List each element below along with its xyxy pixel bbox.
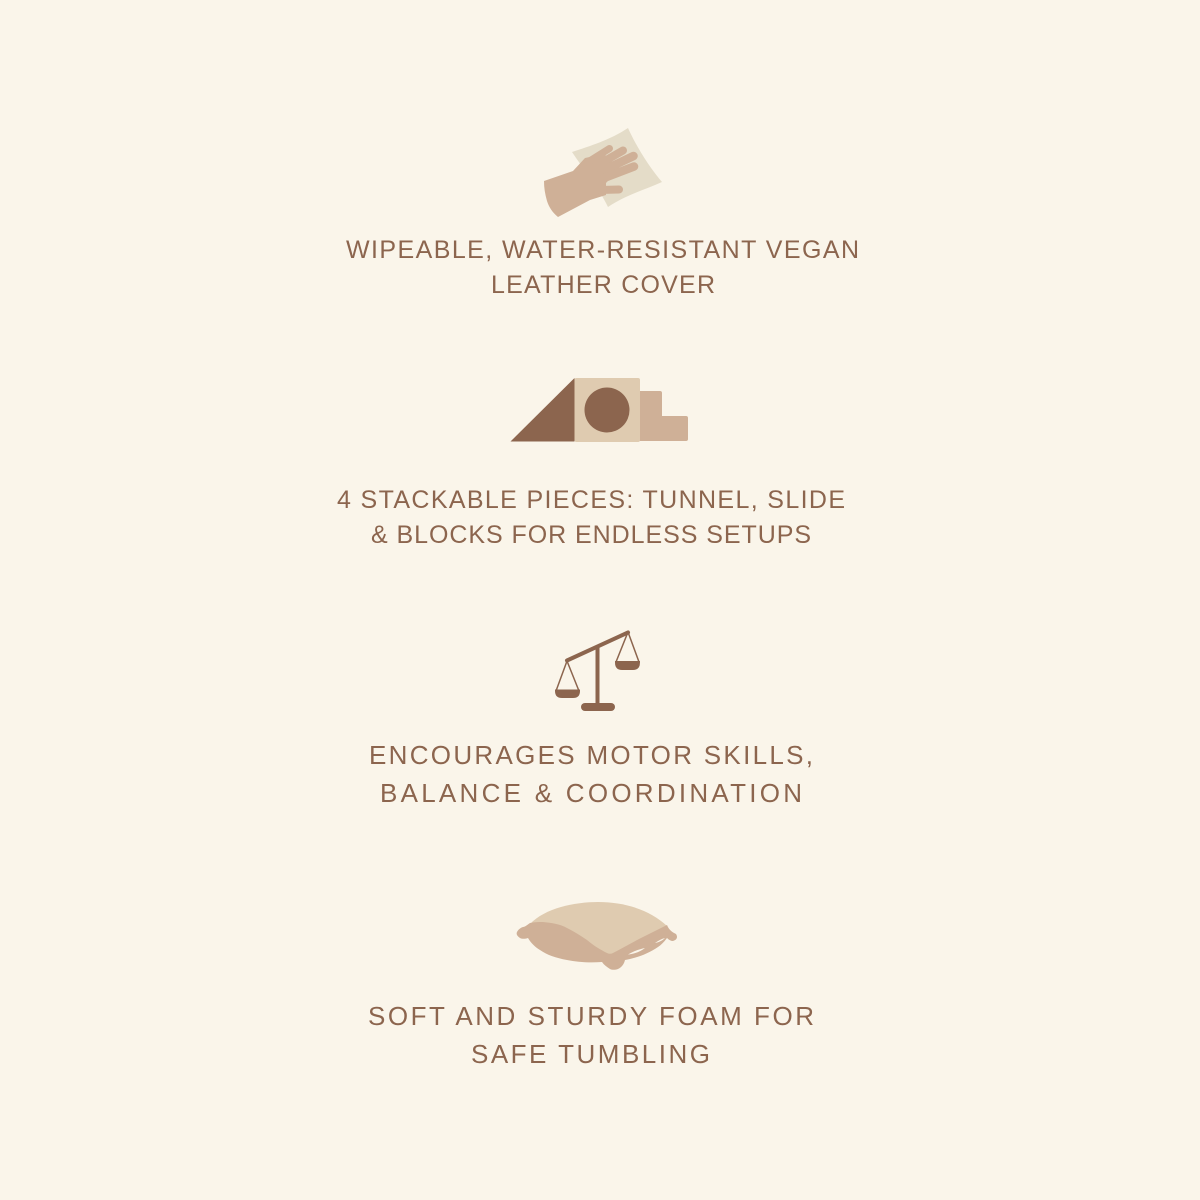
- icon: balance scale: [555, 632, 640, 711]
- text: stackable pieces: 4 STACKABLE PIECES: TUNNEL, SLIDE: [337, 486, 845, 514]
- text: stackable pieces: [337, 486, 845, 549]
- text: motor skills: [369, 740, 813, 808]
- text: motor skills: BALANCE & COORDINATION: [380, 778, 802, 808]
- feature: stackable pieces: [337, 378, 845, 549]
- text: wipeable cover: WIPEABLE, WATER-RESISTANT VEGAN: [346, 236, 859, 264]
- text: soft foam: SAFE TUMBLING: [471, 1039, 710, 1069]
- icon: hand wiping cloth: [544, 128, 662, 217]
- icon: tunnel, slide and blocks: [510, 378, 688, 442]
- feature: wipeable cover: [346, 128, 859, 299]
- icon: foam cushion: [517, 902, 677, 970]
- text: soft foam: SOFT AND STURDY FOAM FOR: [368, 1001, 814, 1031]
- text: wipeable cover: LEATHER COVER: [491, 271, 715, 299]
- feature: soft foam: [368, 902, 814, 1069]
- text: motor skills: ENCOURAGES MOTOR SKILLS,: [369, 740, 813, 770]
- text: wipeable cover: [346, 236, 859, 299]
- text: soft foam: [368, 1001, 814, 1069]
- feature: motor skills: [369, 632, 813, 808]
- text: stackable pieces: & BLOCKS FOR ENDLESS SETUPS: [371, 521, 811, 549]
